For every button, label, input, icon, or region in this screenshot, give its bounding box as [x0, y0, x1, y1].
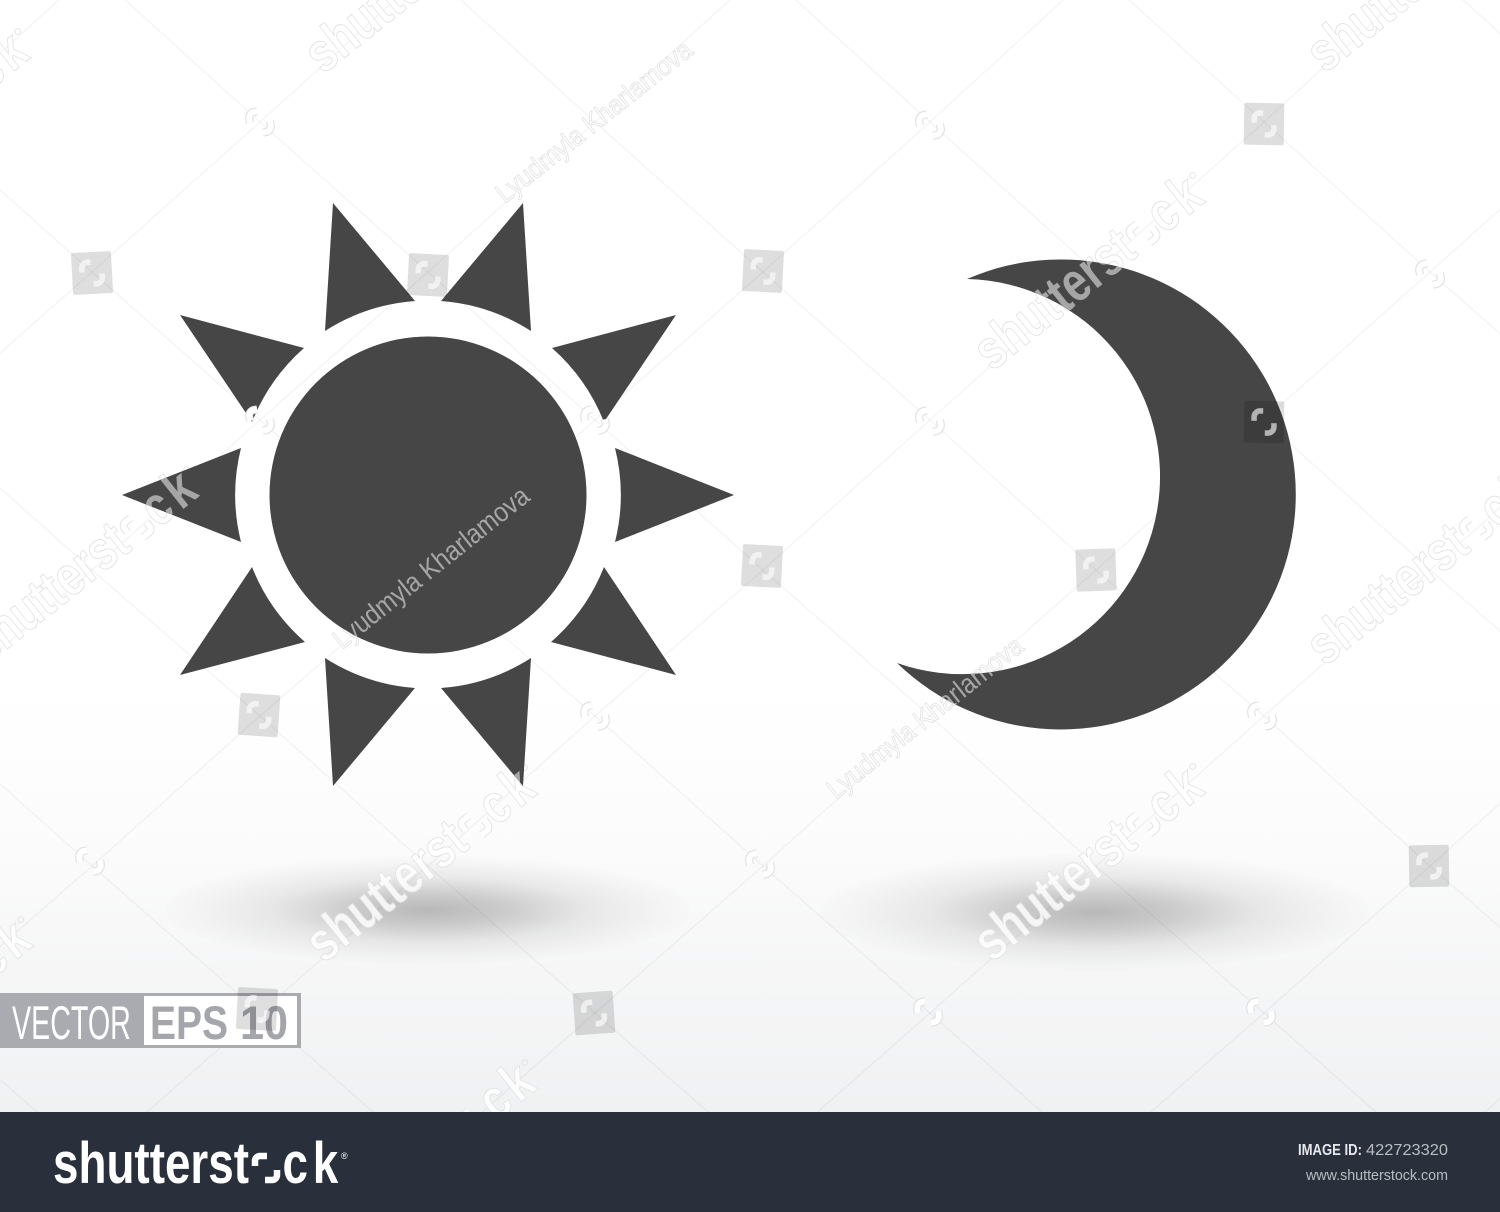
shadow: moon [821, 854, 1369, 970]
footer bar [0, 1112, 1500, 1212]
watermark: author name: Lyudmyla Kharlamova [326, 479, 536, 655]
watermark: author name [326, 33, 1030, 805]
icon: crescent moon [897, 259, 1296, 729]
icon: sun [122, 203, 734, 786]
image id: 422723320 [1366, 1142, 1448, 1159]
shutterstock logo: ® [341, 1151, 348, 1161]
watermark: shutterstock repeats: shutterstock [961, 160, 1217, 382]
watermark text over the dark icons: shutterstock [961, 160, 1217, 382]
shadow: sun [165, 856, 691, 964]
watermark: outlined logo marks [78, 109, 1442, 1025]
watermark: author name: Lyudmyla Kharlamova [820, 629, 1030, 805]
watermark: shutterstock repeats: shutterstock [961, 751, 1217, 973]
image id [1298, 1142, 1448, 1159]
sun rays [122, 203, 734, 786]
image id: IMAGE ID: [1298, 1142, 1362, 1159]
vector EPS 10 badge: EPS [150, 996, 228, 1049]
website url: www.shutterstock.com [1305, 1168, 1448, 1184]
vector EPS 10 badge [0, 993, 301, 1050]
vector EPS 10 badge: VECTOR [12, 998, 131, 1050]
watermark text over the dark icons: shutterstock [293, 752, 549, 974]
watermark text over the dark icons: Lyudmyla Kharlamova [820, 629, 1030, 805]
watermark: logo squares [71, 103, 1449, 1035]
shutterstock logo: shutterstock [53, 1132, 343, 1196]
vector EPS 10 badge: 10 [240, 996, 288, 1049]
watermark: author name: Lyudmyla Kharlamova [489, 33, 699, 209]
sun disc [270, 336, 586, 654]
watermark text over the dark icons: Lyudmyla Kharlamova [326, 479, 536, 655]
watermark: shutterstock repeats: shutterstock [293, 752, 549, 974]
watermark text over the dark icons [146, 261, 1122, 782]
